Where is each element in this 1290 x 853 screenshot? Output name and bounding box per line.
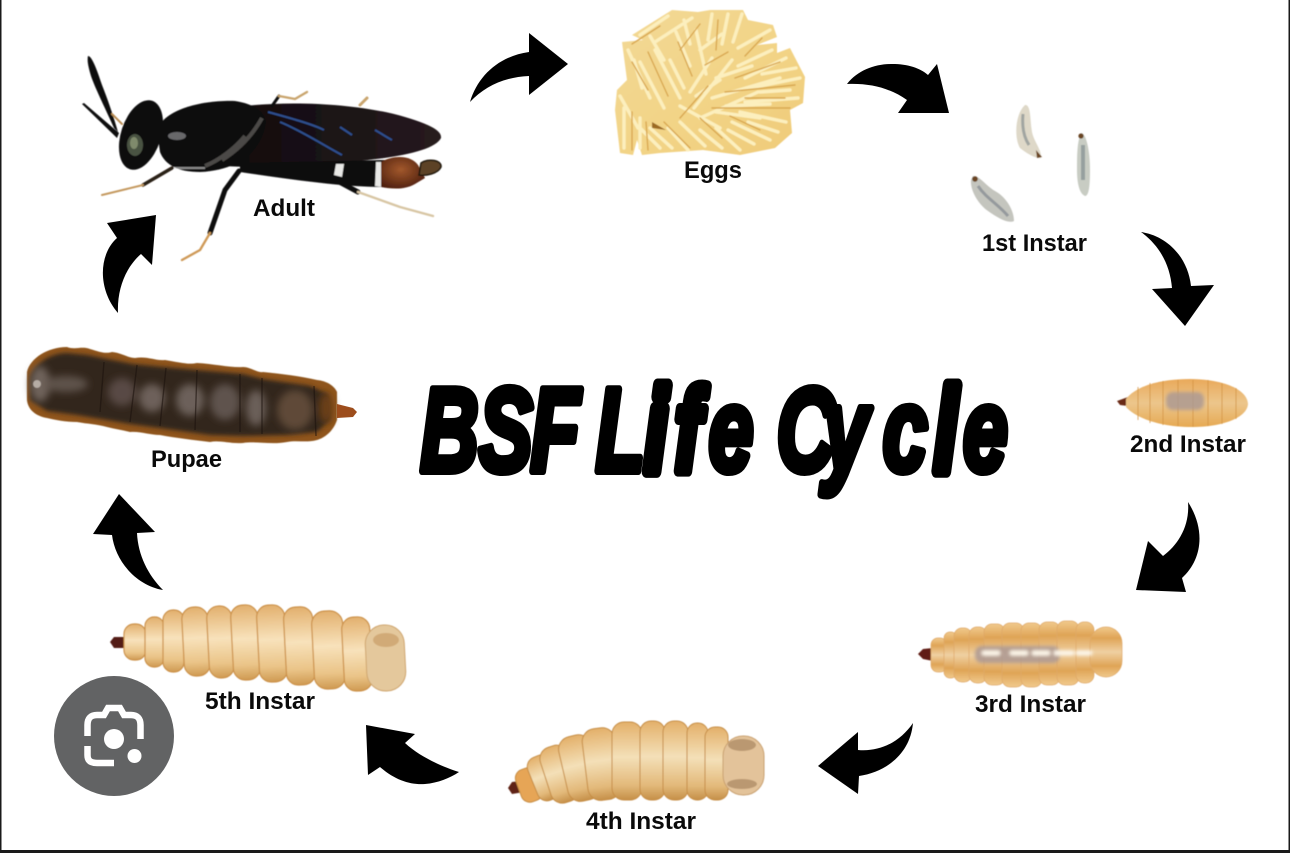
larva C	[971, 176, 1014, 222]
egg grains	[620, 14, 800, 150]
label: 1st Instar: 1st Instar	[982, 230, 1087, 257]
larva B	[1077, 133, 1090, 196]
arrow: eggs to 1st instar	[847, 64, 949, 113]
tail segment	[723, 736, 764, 795]
label: 2nd Instar: 2nd Instar	[1130, 431, 1246, 458]
segment lines	[100, 362, 316, 436]
title: f	[675, 363, 709, 497]
arrow: 2nd to 3rd instar	[1136, 502, 1199, 592]
fly wing	[225, 103, 441, 167]
stage: 1st instar larvae	[971, 105, 1090, 222]
label: 3rd Instar: 3rd Instar	[975, 691, 1086, 718]
larva A	[1016, 105, 1041, 158]
fly thorax	[157, 101, 266, 172]
fly abdomen	[240, 160, 385, 187]
egg mass	[615, 10, 805, 155]
title: c	[883, 363, 928, 497]
body segments	[931, 621, 1122, 687]
body segments	[124, 604, 373, 692]
label: Pupae: Pupae	[151, 446, 222, 473]
fly legs	[102, 92, 433, 260]
head	[1117, 397, 1128, 406]
stage: eggs	[615, 10, 805, 155]
arrow: 1st to 2nd instar	[1141, 232, 1214, 326]
fly antennae	[82, 56, 119, 138]
title: e	[963, 363, 1008, 497]
label: Adult: Adult	[253, 195, 315, 222]
mottled highlights	[30, 366, 333, 430]
title: e	[709, 363, 754, 497]
segment lines	[1138, 380, 1236, 427]
stage: adult fly	[82, 56, 441, 260]
gut patch	[1166, 392, 1204, 410]
arrow: pupae to adult	[103, 215, 156, 313]
head	[918, 648, 933, 661]
body segments	[513, 721, 728, 806]
arrow: adult to eggs	[470, 33, 568, 102]
icon: image search camera button	[54, 676, 174, 796]
stage: pupae	[27, 347, 357, 443]
stage: 5th instar larva	[110, 604, 407, 692]
arrow: 3rd to 4th instar	[818, 723, 913, 794]
title: B	[420, 363, 479, 497]
label: 5th Instar: 5th Instar	[205, 688, 315, 715]
title: l	[934, 363, 959, 497]
title: F	[530, 363, 582, 497]
title: y	[820, 363, 872, 497]
label: Eggs: Eggs	[684, 157, 742, 184]
head	[508, 781, 524, 794]
head spot	[33, 380, 41, 388]
tip	[337, 404, 357, 418]
gut stripe	[975, 646, 1090, 663]
stage: 2nd instar larva	[1117, 379, 1248, 427]
title: L	[596, 363, 645, 497]
fly head	[111, 95, 171, 175]
head	[110, 637, 126, 648]
body	[1126, 379, 1248, 427]
dark interior	[30, 353, 330, 436]
puparium shell	[27, 347, 337, 443]
title: S	[479, 363, 533, 497]
stage: 3rd instar larva	[918, 621, 1122, 687]
stage: 4th instar larva	[508, 721, 764, 806]
arrow: 4th to 5th instar	[366, 725, 459, 784]
title: C	[777, 363, 836, 497]
arrow: 5th instar to pupae	[93, 494, 163, 590]
title: i	[645, 363, 669, 497]
tail segment	[364, 624, 407, 692]
back highlight	[590, 760, 718, 764]
label: 4th Instar: 4th Instar	[586, 808, 696, 835]
